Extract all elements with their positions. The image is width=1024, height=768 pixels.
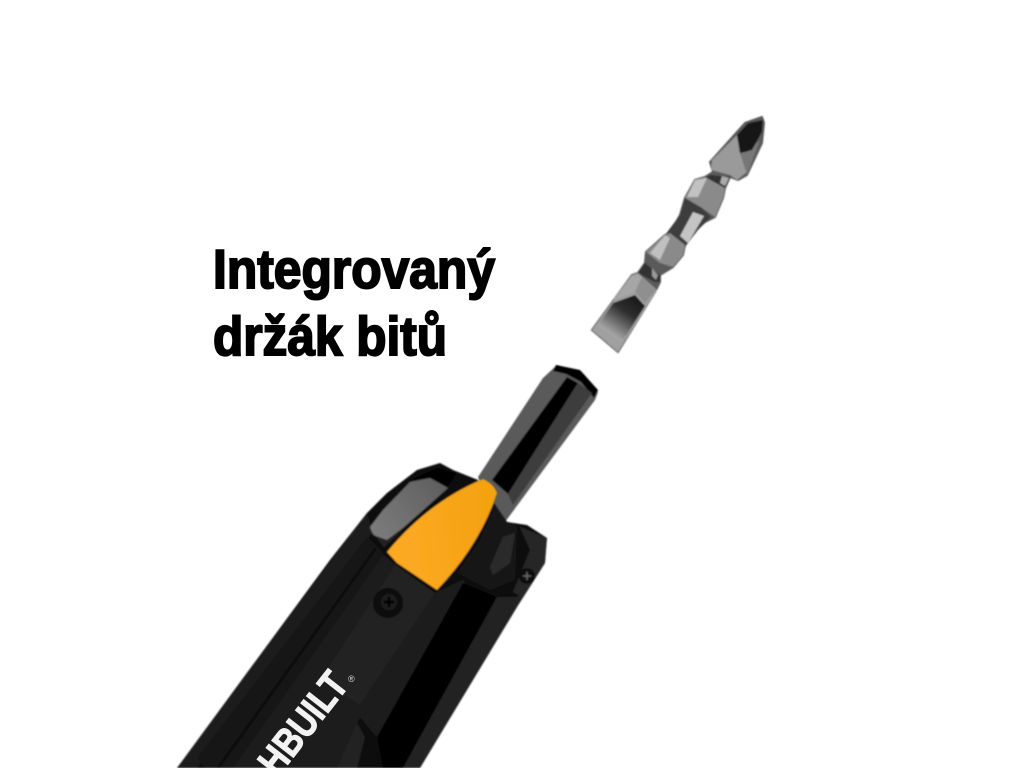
lower neck bbox=[638, 263, 660, 282]
body silhouette bbox=[177, 463, 547, 768]
shaft right facet bbox=[508, 383, 592, 505]
side rail bbox=[197, 537, 383, 768]
dark recess bbox=[377, 583, 497, 768]
shaft top cap bbox=[553, 365, 598, 398]
outer left band bbox=[177, 513, 372, 768]
upper hex collar bbox=[685, 177, 725, 217]
screw left bbox=[373, 588, 403, 618]
shaft black facet bbox=[492, 377, 578, 494]
hex shaft bbox=[478, 365, 598, 522]
lower hex collar bbox=[646, 233, 685, 267]
bit silhouette bbox=[592, 117, 764, 352]
shank highlight bbox=[665, 198, 711, 247]
grey release button bbox=[370, 478, 448, 540]
title bbox=[213, 238, 495, 367]
right hinge lug bbox=[513, 527, 547, 598]
right rail bbox=[402, 595, 523, 768]
icon: double-ended screwdriver bit bbox=[592, 117, 764, 352]
yellow slider bbox=[387, 479, 497, 590]
tool body bbox=[177, 463, 547, 768]
registered mark: ® bbox=[348, 674, 355, 684]
screw right bbox=[519, 568, 535, 584]
textured grip panel bbox=[233, 555, 470, 768]
upper neck bbox=[705, 175, 730, 188]
slotted blade bbox=[592, 273, 657, 352]
title: držák bitů bbox=[213, 305, 447, 367]
rear slider bbox=[337, 723, 365, 768]
title: Integrovaný bbox=[213, 238, 495, 300]
hinge block bbox=[457, 500, 517, 590]
Phillips tip facets bbox=[711, 135, 747, 180]
